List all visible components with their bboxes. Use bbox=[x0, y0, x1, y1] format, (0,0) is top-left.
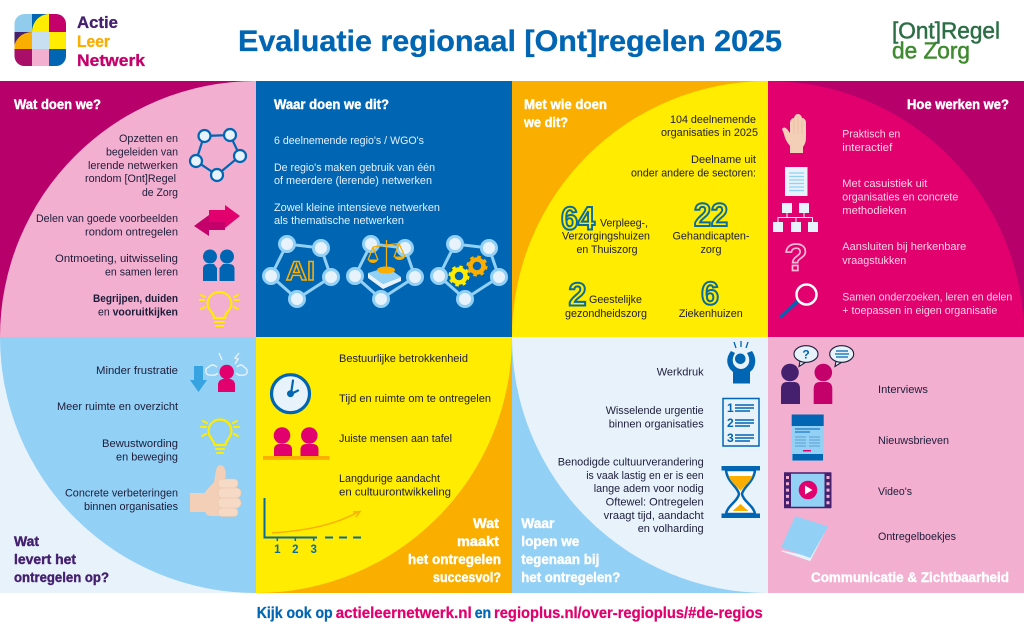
text: knelpunten: vraagt tijd, aandacht bbox=[604, 510, 704, 522]
text: deelnemers: 104 deelnemende bbox=[670, 114, 756, 126]
text: succesfactoren: Bestuurlijke betrokkenheid bbox=[339, 353, 468, 365]
text: werkwijze: Met casuistiek uit bbox=[842, 178, 927, 190]
logo: Actie Leer Netwerk: Netwerk bbox=[77, 51, 146, 70]
logo: Actie Leer Netwerk bbox=[14, 13, 146, 70]
logo: Actie Leer Netwerk: Actie bbox=[77, 13, 118, 32]
text: werkwijze: + toepassen in eigen organisatie bbox=[842, 305, 997, 317]
icon: netwerk tandwielen bbox=[432, 236, 506, 306]
text: netwerken: Opzetten en bbox=[119, 133, 178, 145]
text: knelpunten: Benodigde cultuurverandering bbox=[558, 456, 704, 468]
icon: genummerde lijst bbox=[723, 398, 759, 446]
panel: met wie doen we dit bbox=[512, 81, 768, 337]
stat: 64 bbox=[561, 200, 650, 256]
icon: twee personen bbox=[203, 250, 234, 281]
text: ontmoeting bbox=[55, 253, 178, 278]
text: begrijpen: en vooruitkijken bbox=[98, 306, 178, 318]
text: succesfactoren bbox=[339, 353, 491, 498]
heading: waar lopen we tegenaan: tegenaan bij bbox=[521, 552, 599, 567]
icon: boos persoon bbox=[206, 353, 247, 392]
panel: communicatie en zichtbaarheid bbox=[768, 337, 1024, 593]
stat: 2: Geestelijke bbox=[589, 294, 642, 306]
heading: wat levert het ontregelen op: levert het bbox=[14, 552, 77, 567]
text: kanalen: Interviews bbox=[878, 384, 928, 396]
heading: hoe werken we: Hoe werken we? bbox=[907, 97, 1009, 112]
stat: 2 bbox=[565, 276, 647, 320]
icon: pijlen bbox=[194, 205, 240, 236]
text: netwerken: de Zorg bbox=[142, 187, 178, 199]
footer: links: Kijk ook op bbox=[257, 605, 333, 622]
stat: 64: Verzorgingshuizen bbox=[562, 230, 650, 242]
stat: 6 bbox=[679, 276, 743, 320]
text: knelpunten: en volharding bbox=[638, 523, 704, 535]
heading: waar lopen we tegenaan bbox=[521, 516, 620, 585]
heading: waar lopen we tegenaan: Waar bbox=[521, 516, 555, 531]
icon: duim omhoog bbox=[190, 465, 241, 516]
text: opbrengsten: Concrete verbeteringen bbox=[65, 488, 178, 500]
icon: organigram bbox=[773, 203, 818, 232]
text: kanalen bbox=[878, 384, 956, 543]
text: werkwijze: vraagstukken bbox=[842, 255, 906, 267]
icon: netwerk weegschaal bbox=[348, 236, 422, 306]
heading: met wie doen we dit: we dit? bbox=[523, 115, 568, 130]
text: netwerken: lerende netwerken bbox=[88, 160, 178, 172]
text: opbrengsten: Bewustwording bbox=[102, 438, 178, 450]
stat: 22: zorg bbox=[700, 244, 722, 256]
logo: Actie Leer Netwerk: Leer bbox=[77, 32, 110, 51]
icon: nieuwsbrief bbox=[792, 414, 824, 461]
chart: grafiek 1 2 3: 3 bbox=[310, 544, 317, 556]
panel: hoe werken we bbox=[768, 81, 1024, 337]
heading: waar lopen we tegenaan: lopen we bbox=[521, 534, 580, 549]
text: deelnemers bbox=[631, 114, 758, 180]
stat: 64: en Thuiszorg bbox=[576, 244, 638, 256]
text: deelnemers: onder andere de sectoren: bbox=[631, 168, 756, 180]
text: succesfactoren: Langdurige aandacht bbox=[339, 473, 440, 485]
text: regio's: Zowel kleine intensieve netwerken bbox=[274, 202, 440, 214]
icon: vraagteken: ? bbox=[784, 238, 808, 280]
stat: 2: gezondheidszorg bbox=[565, 308, 647, 320]
heading: wat maakt het ontregelen succesvol: het ontregelen bbox=[408, 552, 501, 567]
text: delen: rondom ontregelen bbox=[85, 226, 178, 238]
heading: waar lopen we tegenaan: het ontregelen? bbox=[521, 570, 620, 585]
text: opbrengsten: Minder frustratie bbox=[96, 365, 178, 377]
heading: wat maakt het ontregelen succesvol: succesvol? bbox=[433, 570, 501, 585]
text: werkwijze: interactief bbox=[842, 142, 893, 154]
text: regio's: als thematische netwerken bbox=[274, 215, 404, 227]
text: netwerken bbox=[85, 133, 178, 199]
text: ontmoeting: Ontmoeting, uitwisseling bbox=[55, 253, 178, 265]
text: knelpunten: binnen organisaties bbox=[609, 418, 704, 430]
text: werkwijze: organisaties en concrete bbox=[842, 192, 958, 204]
heading: wat maakt het ontregelen succesvol: maakt bbox=[457, 534, 500, 549]
text: kanalen: Ontregelboekjes bbox=[878, 531, 956, 543]
text: regio's bbox=[274, 135, 440, 227]
text: werkwijze: methodieken bbox=[842, 205, 906, 217]
text: knelpunten: is vaak lastig en er is een bbox=[586, 470, 704, 482]
text: delen: Delen van goede voorbeelden bbox=[36, 213, 178, 225]
stat: 22: 22 bbox=[694, 197, 728, 233]
text: begrijpen: Begrijpen, duiden bbox=[93, 293, 178, 305]
text: kanalen: Video's bbox=[878, 486, 912, 498]
icon: netwerk AI: AI bbox=[286, 256, 315, 286]
heading: wat doen we: Wat doen we? bbox=[14, 97, 101, 112]
icon: vergrootglas bbox=[781, 284, 816, 316]
title: Evaluatie regionaal [Ont]regelen 2025 bbox=[238, 25, 782, 58]
text: knelpunten: Wisselende urgentie bbox=[606, 405, 704, 417]
stat: 64: 64 bbox=[561, 200, 595, 236]
text: knelpunten: Oftewel: Ontregelen bbox=[606, 496, 704, 508]
footer: links: regioplus.nl/over-regioplus/#de-regios bbox=[494, 605, 763, 622]
icon: netwerk bbox=[190, 129, 246, 181]
text: begrijpen bbox=[93, 293, 178, 318]
text: regio's: De regio's maken gebruik van één bbox=[274, 162, 435, 174]
stat: 6: 6 bbox=[701, 276, 719, 312]
footer: links: en bbox=[475, 605, 491, 622]
text: ontmoeting: en samen leren bbox=[105, 266, 178, 278]
stat: 2: 2 bbox=[569, 276, 586, 312]
text: knelpunten: Werkdruk bbox=[657, 366, 704, 378]
chart: grafiek 1 2 3: 1 bbox=[274, 544, 281, 556]
text: werkwijze: Praktisch en bbox=[842, 128, 900, 140]
heading: met wie doen we dit bbox=[523, 97, 607, 130]
text: deelnemers: Deelname uit bbox=[691, 154, 756, 166]
heading: wat maakt het ontregelen succesvol: Wat bbox=[473, 516, 500, 531]
icon: pijl omlaag bbox=[190, 366, 207, 392]
text: opbrengsten bbox=[57, 365, 178, 513]
text: opbrengsten: en beweging bbox=[116, 452, 178, 464]
stat: 64: Verpleeg-, bbox=[600, 218, 648, 230]
icon: interview personen bbox=[781, 346, 854, 404]
stat: 22: Gehandicapten- bbox=[672, 230, 750, 242]
panel: wat doen we bbox=[0, 81, 256, 337]
text: knelpunten: lange adem voor nodig bbox=[594, 483, 704, 495]
text: opbrengsten: Meer ruimte en overzicht bbox=[57, 401, 178, 413]
icon: boekje bbox=[782, 517, 827, 560]
text: werkwijze: Aansluiten bij herkenbare bbox=[842, 241, 966, 253]
icon: lamp bbox=[201, 420, 239, 453]
text: netwerken: rondom [Ont]Regel bbox=[85, 173, 176, 185]
heading: wat levert het ontregelen op bbox=[14, 534, 109, 585]
icon: netwerk AI bbox=[264, 236, 338, 306]
logo: [Ont]Regel de Zorg: de Zorg bbox=[892, 38, 970, 64]
logo: [Ont]Regel de Zorg: [Ont]Regel bbox=[892, 18, 1000, 44]
text: kanalen: Nieuwsbrieven bbox=[878, 435, 949, 447]
panel: waar lopen we tegenaan bbox=[512, 337, 768, 593]
text: succesfactoren: en cultuurontwikkeling bbox=[339, 486, 451, 498]
text: knelpunten bbox=[558, 366, 704, 535]
panel: waar doen we dit bbox=[256, 81, 512, 337]
stat: 6: Ziekenhuizen bbox=[679, 308, 743, 320]
text: regio's: of meerdere (lerende) netwerken bbox=[274, 175, 432, 187]
icon: genummerde lijst: 1 bbox=[727, 401, 734, 415]
panel: wat maakt het succesvol bbox=[256, 337, 512, 593]
icon: genummerde lijst: 2 bbox=[727, 416, 734, 430]
text: delen bbox=[36, 213, 178, 238]
icon: video bbox=[784, 472, 832, 508]
heading: wat levert het ontregelen op: ontregelen op? bbox=[14, 570, 109, 585]
text: opbrengsten: binnen organisaties bbox=[84, 501, 178, 513]
chart: grafiek 1 2 3 bbox=[264, 498, 361, 556]
icon: lamp bbox=[200, 292, 239, 326]
text: succesfactoren: Tijd en ruimte om te ontregelen bbox=[339, 393, 491, 405]
text: regio's: 6 deelnemende regio's / WGO's bbox=[274, 135, 424, 147]
text: succesfactoren: Juiste mensen aan tafel bbox=[339, 433, 452, 445]
chart: grafiek 1 2 3: 2 bbox=[292, 544, 299, 556]
panel: wat levert het op bbox=[0, 337, 256, 593]
icon: klok bbox=[272, 375, 310, 413]
heading: met wie doen we dit: Met wie doen bbox=[524, 97, 607, 112]
heading: wat levert het ontregelen op: Wat bbox=[14, 534, 40, 549]
footer: links: actieleernetwerk.nl bbox=[336, 605, 472, 622]
footer: links bbox=[257, 605, 763, 622]
text: netwerken: begeleiden van bbox=[106, 146, 178, 158]
icon: werkdruk persoon bbox=[727, 341, 755, 384]
heading: waar doen we dit: Waar doen we dit? bbox=[274, 97, 389, 112]
icon: genummerde lijst: 3 bbox=[727, 431, 734, 445]
text: werkwijze: Samen onderzoeken, leren en delen bbox=[842, 292, 1012, 304]
icon: zandloper bbox=[722, 466, 760, 518]
heading: communicatie en zichtbaarheid: Communicatie & Zichtbaarheid bbox=[811, 570, 1009, 585]
icon: interview personen: ? bbox=[802, 348, 810, 362]
heading: wat maakt het ontregelen succesvol bbox=[408, 516, 501, 585]
text: werkwijze bbox=[842, 128, 1012, 317]
icon: hand bbox=[782, 114, 806, 153]
icon: mensen aan tafel bbox=[263, 427, 330, 460]
logo: [Ont]Regel de Zorg bbox=[892, 18, 1000, 64]
text: deelnemers: organisaties in 2025 bbox=[661, 127, 758, 139]
icon: document bbox=[785, 167, 808, 196]
stat: 22 bbox=[672, 197, 750, 256]
